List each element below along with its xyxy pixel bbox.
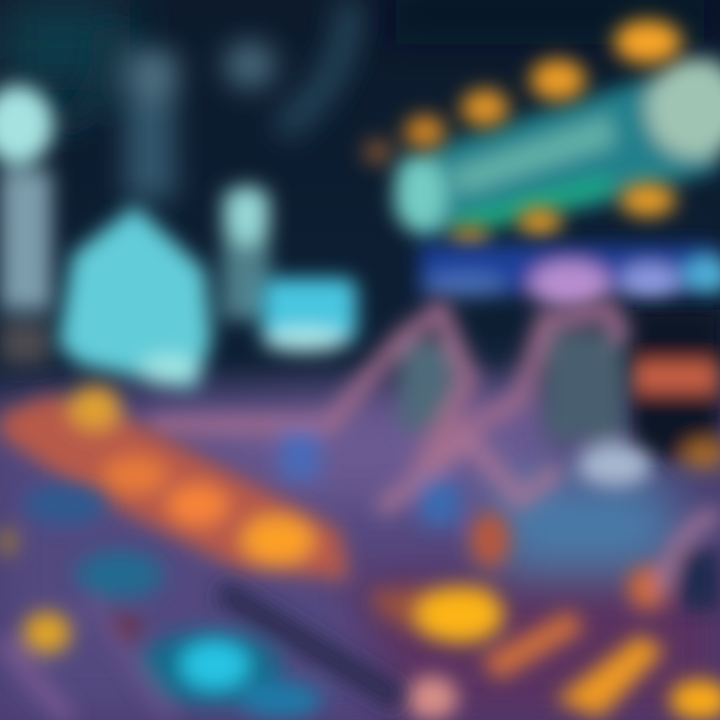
grey pillars with pink zigzag line	[150, 310, 653, 568]
right orange bars	[630, 310, 720, 469]
dark towers at the top	[60, 0, 350, 200]
central cyan house	[58, 185, 270, 390]
right teal billboard	[394, 55, 720, 240]
lower glowing lights	[370, 515, 720, 720]
left cyan tower	[0, 85, 54, 365]
orange diagonal walkway	[0, 386, 350, 580]
blue band	[420, 245, 720, 309]
lower left markers and blue lights	[0, 485, 400, 720]
orange lights	[363, 20, 682, 250]
small cyan cube	[262, 278, 357, 352]
